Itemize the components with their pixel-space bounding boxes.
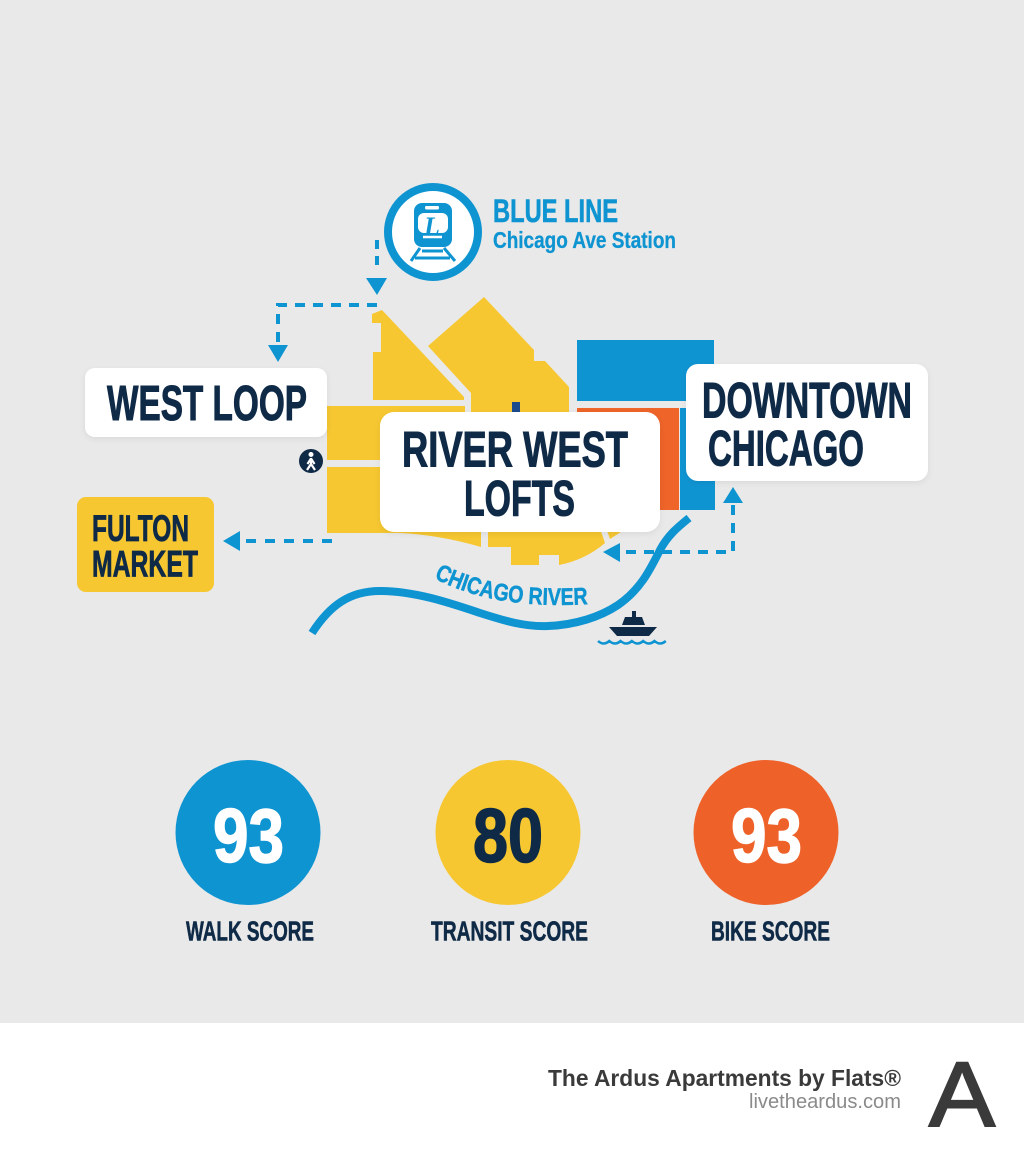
- Blue Line heading: BLUE LINE: [493, 193, 618, 229]
- label: Downtown Chicago: CHICAGO: [708, 420, 864, 476]
- icon: pedestrian: [299, 449, 323, 473]
- footer logo letter: A: [929, 1044, 996, 1146]
- yellow block: west upper: [327, 406, 465, 460]
- yellow block: north-east: [428, 297, 569, 420]
- yellow block: north-west: [372, 310, 464, 400]
- score: walk: [176, 760, 320, 946]
- score: transit: 80: [473, 794, 543, 879]
- score: bike: [694, 760, 838, 946]
- score: transit: [431, 760, 588, 946]
- station name: Chicago Ave Station: [493, 227, 676, 253]
- label: Fulton Market: FULTON: [92, 508, 189, 549]
- label: Downtown Chicago: DOWNTOWN: [702, 372, 912, 428]
- icon: Blue Line train roundel: L: [423, 212, 440, 241]
- arrow: River West to Downtown: [603, 487, 743, 562]
- label: West Loop: WEST LOOP: [107, 377, 307, 431]
- label: River West Lofts: [380, 412, 660, 532]
- label: Downtown Chicago: [686, 364, 928, 481]
- arrow: to Fulton Market: [223, 531, 332, 551]
- blue downtown block: [577, 340, 714, 401]
- Chicago River label: CHICAGO RIVER: [436, 565, 588, 606]
- footer website: livetheardus.com: [749, 1091, 901, 1113]
- score: bike: 93: [731, 794, 802, 879]
- icon: boat: [598, 611, 666, 644]
- label: River West Lofts: LOFTS: [464, 470, 575, 526]
- blue downtown strip: [680, 408, 715, 510]
- score: transit: TRANSIT SCORE: [431, 916, 588, 946]
- label: Fulton Market: MARKET: [92, 544, 198, 584]
- yellow block: south: [488, 520, 605, 565]
- score: walk: 93: [213, 794, 284, 879]
- label: West Loop: [85, 368, 327, 437]
- score: walk: WALK SCORE: [186, 916, 314, 946]
- orange downtown block: [577, 408, 679, 510]
- footer: [0, 1023, 1024, 1154]
- yellow block: west lower: [327, 467, 481, 547]
- label: River West Lofts: RIVER WEST: [402, 422, 628, 478]
- footer brand name: The Ardus Apartments by Flats®: [548, 1065, 901, 1091]
- icon: Blue Line train roundel: [388, 187, 478, 277]
- arrow: station down to West Loop: [268, 240, 387, 362]
- small station marker: [512, 402, 520, 412]
- Chicago River line: [312, 518, 689, 633]
- map of neighbourhood blocks: [327, 297, 715, 565]
- yellow block: south-east sliver: [605, 525, 624, 539]
- score: bike: BIKE SCORE: [711, 916, 830, 946]
- label: Fulton Market: [77, 497, 214, 592]
